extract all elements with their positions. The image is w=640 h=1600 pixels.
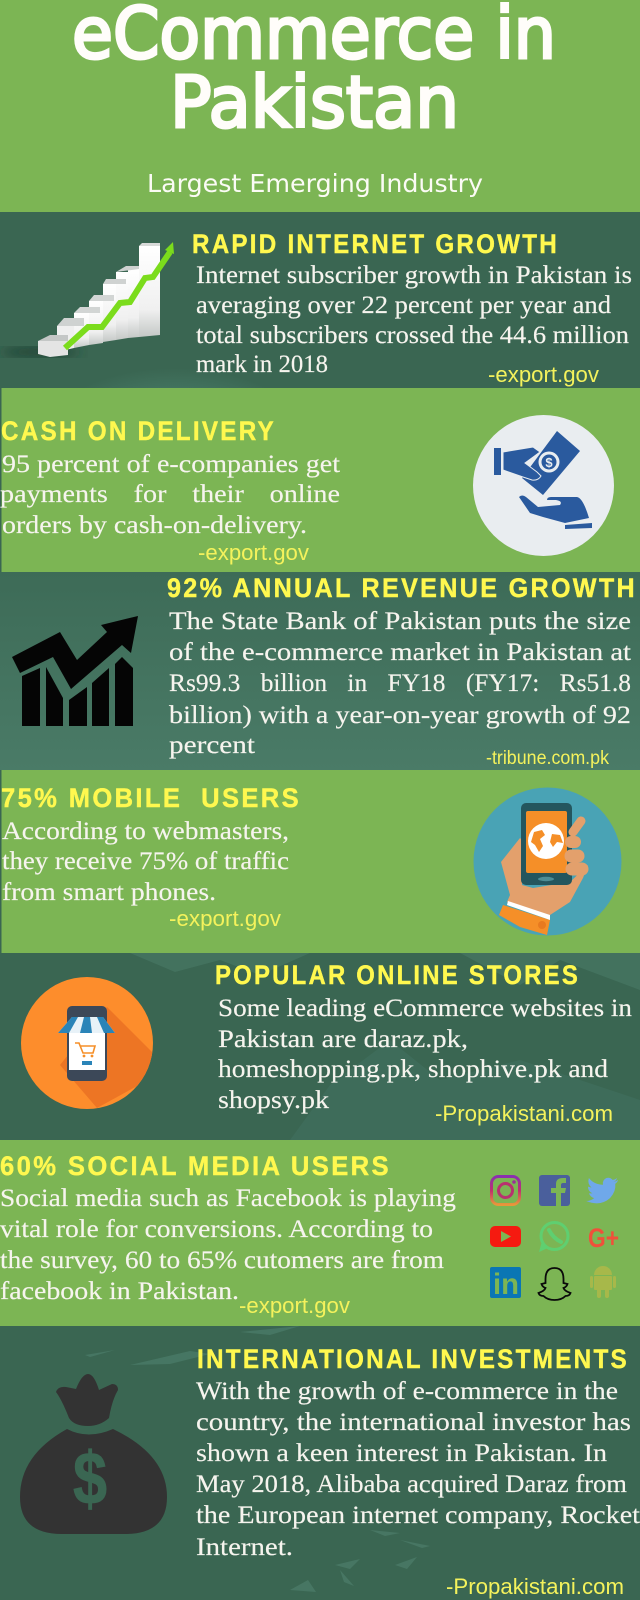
body text: shopsy.pk [218,1085,329,1114]
body text: The State Bank of Pakistan puts the size [169,606,631,635]
icon: mobile shop on orange circle [21,977,153,1109]
body text: According to webmasters, [2,816,289,845]
body text [196,260,632,378]
body text: With the growth of e-commerce in the [196,1376,618,1405]
body text: Social media such as Facebook is playing [0,1183,456,1212]
icon: whatsapp [539,1222,568,1252]
body text: the survey, 60 to 65% cutomers are from [0,1245,444,1274]
source: -tribune.com.pk [486,748,609,769]
body text: they receive 75% of traffic [2,846,289,875]
source: -export.gov [169,906,281,931]
panel: social media users [0,1140,640,1326]
body text: country, the international investor has [196,1407,631,1436]
heading: POPULAR ONLINE STORES [215,960,580,990]
icon: hands exchanging money: $ [545,455,553,470]
icon: google plus: G+ [588,1223,619,1253]
heading: CASH ON DELIVERY [1,416,276,446]
icon grid: social networks [490,1175,619,1301]
panel: rapid internet growth [0,212,640,438]
icon: android [590,1266,616,1298]
heading: 60% SOCIAL MEDIA USERS [0,1151,391,1181]
source: -export.gov [239,1293,350,1318]
panel: mobile users [0,770,640,953]
icon: instagram [492,1176,520,1204]
body text: total subscribers crossed the 44.6 million [196,320,629,349]
icon: youtube [490,1226,521,1247]
icon: hand holding smartphone [474,788,622,936]
source: -export.gov [488,362,599,387]
body text: payments for their online [0,479,340,508]
body text: mark in 2018 [196,349,328,378]
body text: Internet. [196,1532,293,1561]
body text: billion) with a year-on-year growth of 92 [169,700,631,729]
icon: rising bar chart with green arrow [0,242,174,357]
icon: black chart with arrow [12,616,138,726]
body text [2,816,289,906]
panel: international investments [0,1326,640,1600]
title [72,0,556,144]
icon: snapchat [538,1268,570,1300]
source: -Propakistani.com [446,1574,624,1599]
body text: vital role for conversions. According to [0,1214,433,1243]
panel: annual revenue growth [0,572,640,770]
body text [218,993,632,1114]
body text [0,1183,456,1305]
body text [169,606,631,759]
source: -Propakistani.com [435,1101,613,1126]
icon: twitter [586,1178,618,1203]
body text: Rs99.3 billion in FY18 (FY17: Rs51.8 [169,668,631,697]
title: Pakistan [170,61,459,144]
body text: of the e-commerce market in Pakistan at [169,637,631,666]
heading: 75% MOBILE USERS [1,783,301,813]
heading: RAPID INTERNET GROWTH [192,229,559,259]
body text: May 2018, Alibaba acquired Daraz from [196,1469,627,1498]
body text: the European internet company, Rocket [196,1500,640,1529]
icon: money bag: $ [73,1437,107,1520]
body text: percent [169,730,255,759]
subtitle: Largest Emerging Industry [147,169,483,198]
body text: Pakistan are daraz.pk, [218,1024,468,1053]
icon: linkedin: in [493,1268,519,1301]
body text: shown a keen interest in Pakistan. In [196,1438,607,1467]
body text [0,449,340,539]
body text [196,1376,640,1561]
body text: averaging over 22 percent per year and [196,290,611,319]
panel: popular online stores [0,953,640,1140]
body text: Internet subscriber growth in Pakistan is [196,260,632,289]
icon: facebook [539,1175,570,1206]
header panel [0,0,640,212]
body text: Some leading eCommerce websites in [218,993,632,1022]
body text: orders by cash-on-delivery. [2,510,307,539]
body text: homeshopping.pk, shophive.pk and [218,1054,608,1083]
body text: facebook in Pakistan. [0,1276,239,1305]
panel: cash on delivery [0,388,640,572]
body text: 95 percent of e-companies get [2,449,340,478]
source: -export.gov [198,540,309,565]
icon: hands exchanging money [473,415,614,556]
icon: money bag [20,1374,167,1534]
body text: from smart phones. [2,877,216,906]
